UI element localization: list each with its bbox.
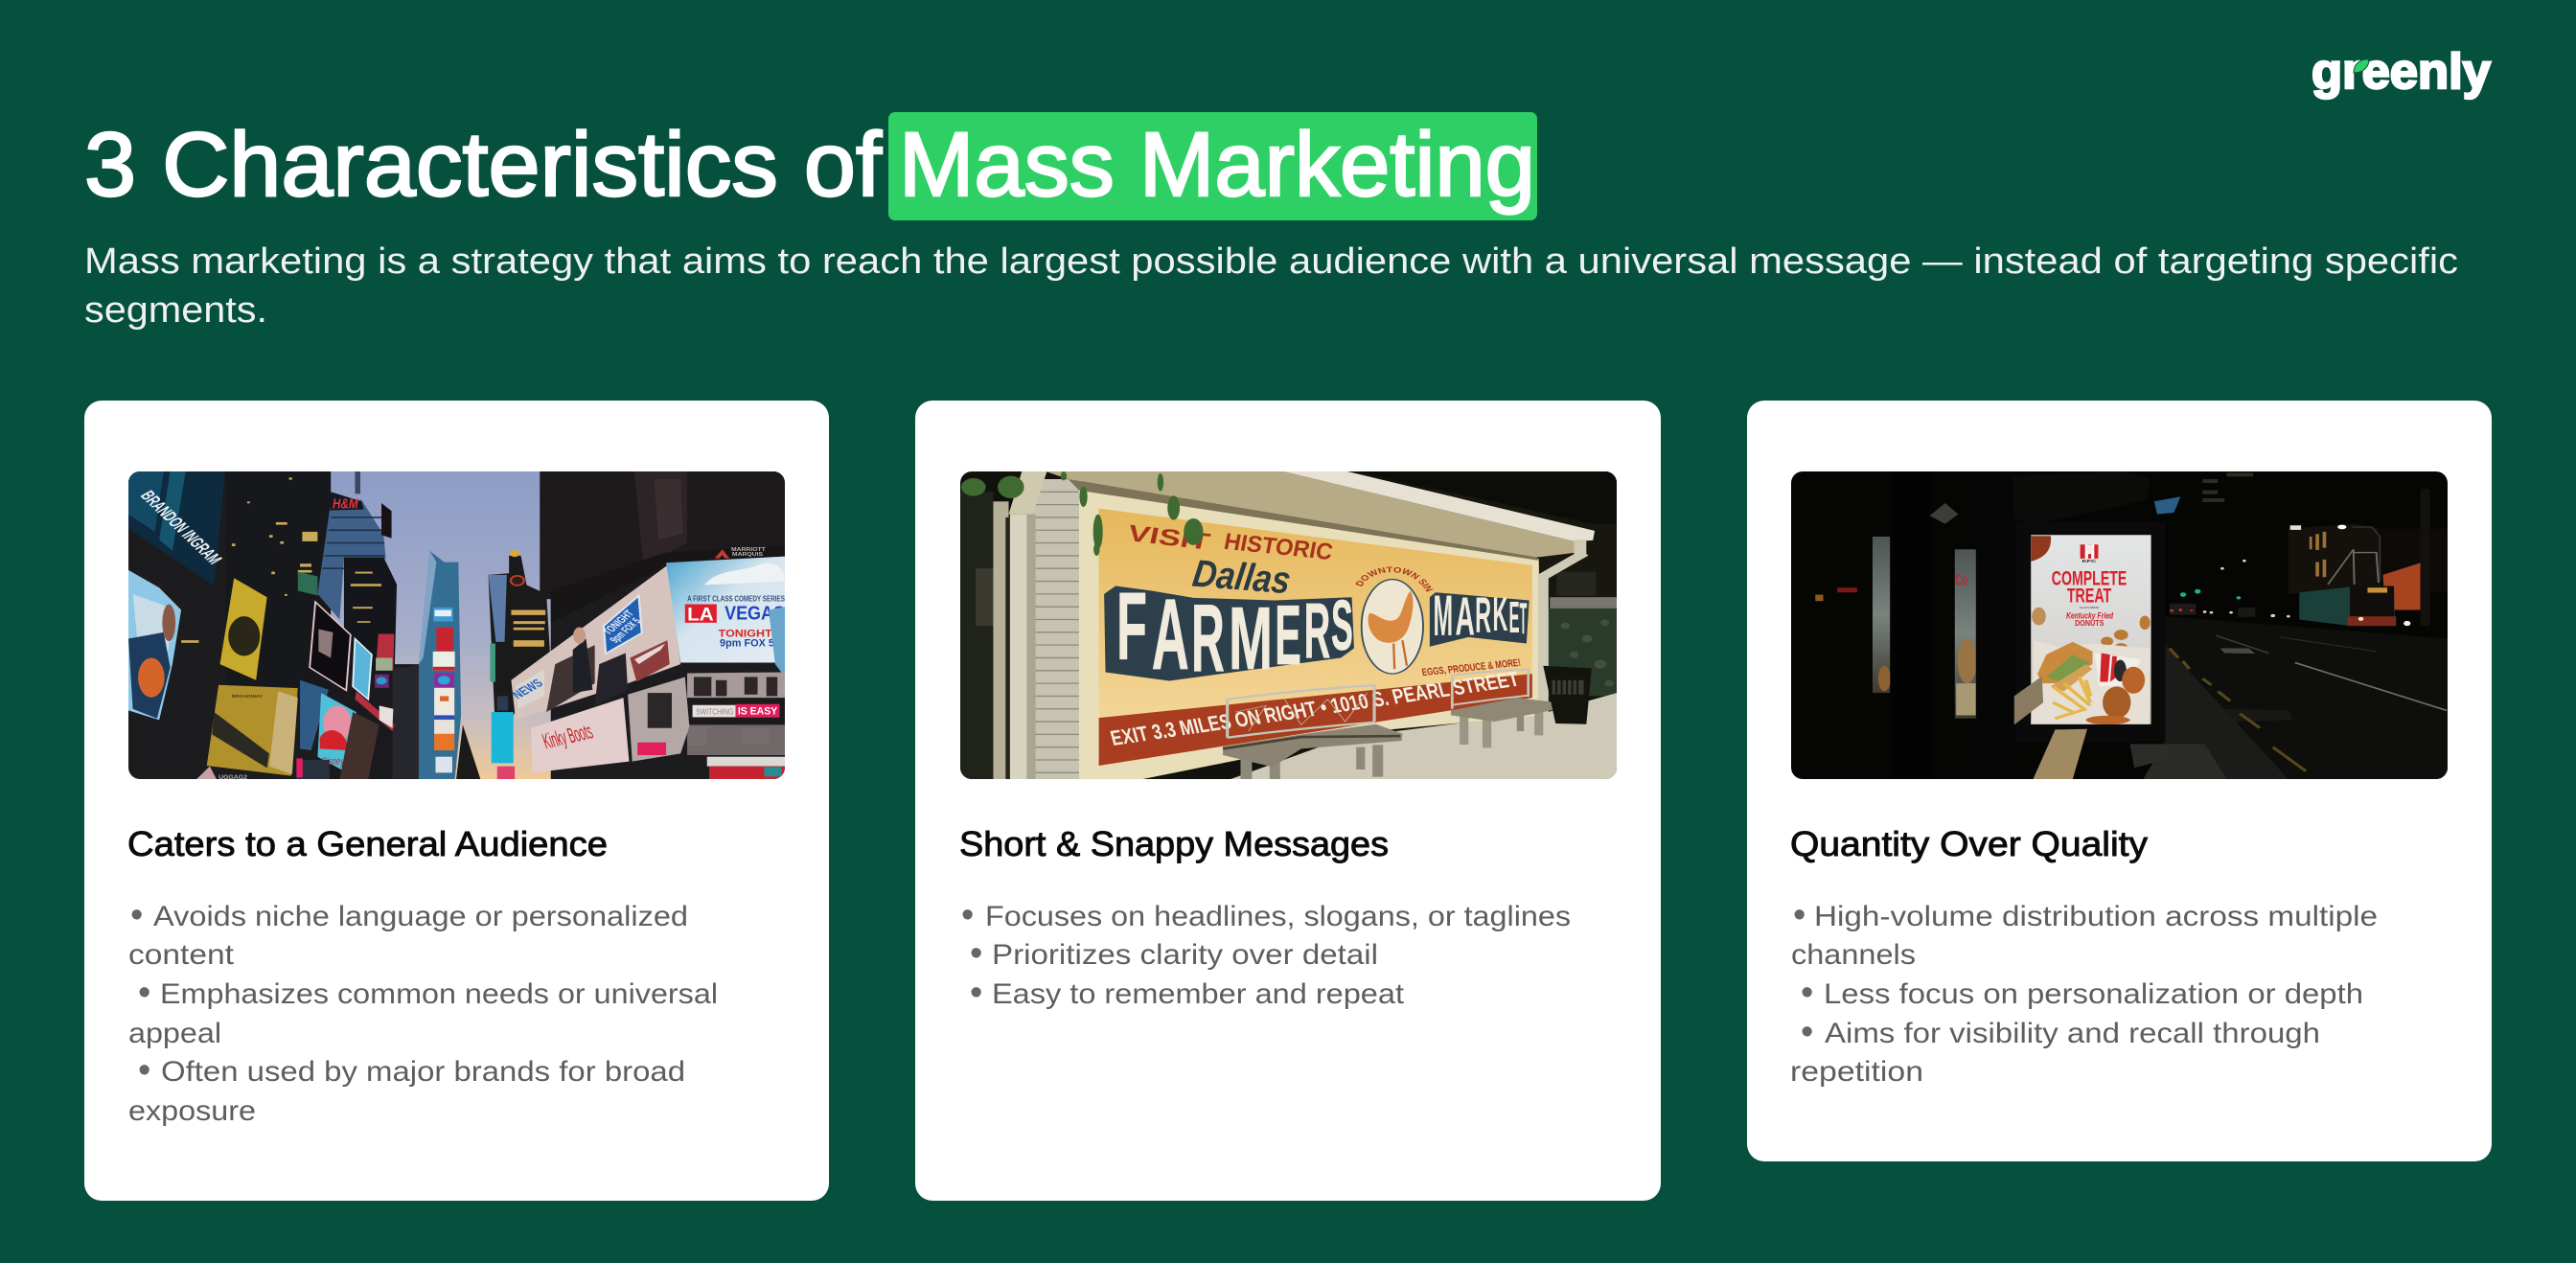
photo: Dallas farmers market mural: EGGS, PRODUCE & MORE! xyxy=(1421,656,1522,678)
bullet list: • xyxy=(961,895,974,935)
card heading: Quantity Over Quality xyxy=(1790,824,2148,863)
photo: KFC bus shelter ad at night: FEATURING xyxy=(2080,607,2100,609)
photo: Times Square billboards xyxy=(128,471,785,781)
photo: KFC bus shelter ad at night: Co xyxy=(1955,571,1967,589)
photo: Dallas farmers market mural: T xyxy=(1520,595,1527,644)
photo: Dallas farmers market mural: E xyxy=(1275,588,1301,682)
bullet list: Often used by major brands for broad xyxy=(161,1056,685,1088)
bullet list: Aims for visibility and recall through xyxy=(1825,1018,2320,1049)
photo: KFC bus shelter ad at night xyxy=(1791,471,2448,779)
bullet list: appeal xyxy=(128,1018,221,1049)
bullet list: Easy to remember and repeat xyxy=(992,978,1405,1010)
photo: Times Square billboards: BROADWAY xyxy=(232,695,264,700)
photo: Times Square billboards: LA xyxy=(687,604,714,625)
bullet list: Focuses on headlines, slogans, or taglines xyxy=(985,901,1571,932)
photo: Times Square billboards: 9pm FOX 5 xyxy=(607,616,644,645)
card heading: Short & Snappy Messages xyxy=(959,824,1389,863)
photo: Dallas farmers market mural: A xyxy=(1456,587,1475,647)
icon: leaf on the r xyxy=(2354,59,2369,73)
photo: Dallas farmers market mural: M xyxy=(1434,583,1453,648)
bullet list: High-volume distribution across multiple xyxy=(1814,901,2378,932)
bullet list: • xyxy=(970,973,982,1013)
photo: Dallas farmers market mural xyxy=(960,471,1617,779)
photo: Times Square billboards: MARQUIS xyxy=(732,552,764,558)
photo: Dallas farmers market mural: R xyxy=(1191,584,1225,691)
photo: KFC bus shelter ad at night: COMPLETE xyxy=(2052,567,2127,590)
panel: short messages xyxy=(915,401,1661,1201)
photo: Times Square billboards: Disney xyxy=(322,755,345,768)
bullet list: • xyxy=(1801,973,1813,1013)
bullet list xyxy=(961,895,1571,1013)
photo: Dallas farmers market mural: E xyxy=(1509,593,1520,642)
photo: Dallas farmers market mural: R xyxy=(1304,586,1330,675)
photo: KFC bus shelter ad at night: Kentucky Fried xyxy=(2066,611,2113,621)
photo: Times Square billboards: TONIGHT xyxy=(719,628,772,639)
bullet list xyxy=(128,895,718,1127)
bullet list: exposure xyxy=(128,1095,256,1127)
bullet list: Prioritizes clarity over detail xyxy=(992,939,1378,971)
card heading: Caters to a General Audience xyxy=(127,824,608,863)
subtitle: segments. xyxy=(84,290,267,331)
photo: Times Square billboards: H&M xyxy=(333,495,358,512)
photo: Dallas farmers market mural: A xyxy=(1152,579,1189,691)
bullet list: • xyxy=(130,895,143,935)
photo: Times Square billboards: TONIGHT xyxy=(600,608,637,637)
title: 3 Characteristics of xyxy=(84,114,883,216)
logo: greenly: greenly xyxy=(2312,44,2491,100)
photo: Dallas farmers market mural: Dallas xyxy=(1190,552,1294,602)
photo: KFC bus shelter ad at night: TREAT xyxy=(2067,585,2112,608)
photo: Dallas farmers market mural: F xyxy=(1116,573,1147,679)
bullet list xyxy=(1790,895,2378,1088)
photo: Times Square billboards: Kinky Boots xyxy=(539,720,596,753)
photo: KFC bus shelter ad at night: DONUTS xyxy=(2075,620,2104,629)
photo: Dallas farmers market mural: VISIT xyxy=(1125,520,1212,555)
bullet list: • xyxy=(1801,1012,1813,1052)
photo: Dallas farmers market mural: DOWNTOWN SINCE 1941 xyxy=(1355,567,1434,592)
photo: Dallas farmers market mural: S xyxy=(1331,587,1353,666)
bullet list: Avoids niche language or personalized xyxy=(153,901,688,932)
bullet list: Emphasizes common needs or universal xyxy=(160,978,718,1010)
subtitle: Mass marketing is a strategy that aims to reach the largest possible audience with a universal message — instead of targeting specific xyxy=(84,241,2458,282)
panel: general audience xyxy=(84,401,829,1201)
title xyxy=(84,112,1537,220)
photo: Dallas farmers market mural: K xyxy=(1493,588,1508,642)
photo: Times Square billboards: BRANDON INGRAM xyxy=(136,488,227,567)
bullet list: • xyxy=(138,973,150,1013)
photo: Times Square billboards: SWITCHING xyxy=(696,708,733,717)
photo: KFC bus shelter ad at night: KFC xyxy=(2082,560,2097,564)
photo: Dallas farmers market mural: R xyxy=(1475,586,1491,643)
bullet list: • xyxy=(1793,895,1806,935)
photo: Times Square billboards: UGGAG2 xyxy=(218,773,247,781)
bullet list: content xyxy=(128,939,235,971)
bullet list: • xyxy=(138,1050,150,1091)
panel: quantity over quality xyxy=(1747,401,2492,1161)
bullet list: • xyxy=(970,933,982,974)
subtitle xyxy=(84,241,2458,331)
photo: Dallas farmers market mural: HISTORIC xyxy=(1222,529,1335,565)
photo: Times Square billboards: MARRIOTT xyxy=(731,547,766,553)
title highlight: Mass Marketing xyxy=(899,114,1535,216)
photo: Dallas farmers market mural: M xyxy=(1229,589,1273,689)
bullet list: channels xyxy=(1791,939,1916,971)
bullet list: Less focus on personalization or depth xyxy=(1824,978,2363,1010)
photo: Times Square billboards: NEWS xyxy=(510,677,546,701)
bullet list: repetition xyxy=(1790,1056,1923,1088)
